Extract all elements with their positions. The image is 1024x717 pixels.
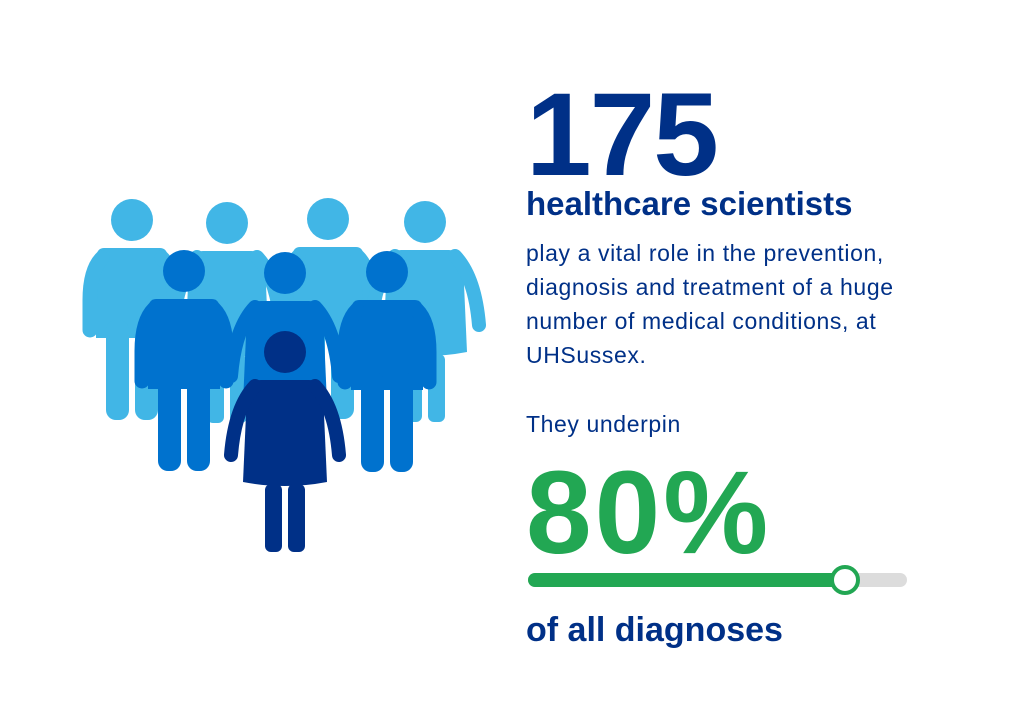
body text: diagnosis and treatment of a huge [526,274,894,300]
text: of all diagnoses: of all diagnoses [526,611,783,649]
body text: play a vital role in the prevention, [526,240,884,266]
text: They underpin: They underpin [526,411,681,437]
body text: UHSussex. [526,342,646,368]
progress bar [528,565,907,595]
big number 175: 175 [526,69,717,201]
body text [526,240,894,368]
big percentage 80%: 80% [526,447,771,579]
back row figures [90,198,479,423]
middle row figures [142,250,429,473]
body text: number of medical conditions, at [526,308,876,334]
heading: healthcare scientists: healthcare scientists [526,185,852,222]
front figure [231,331,339,552]
